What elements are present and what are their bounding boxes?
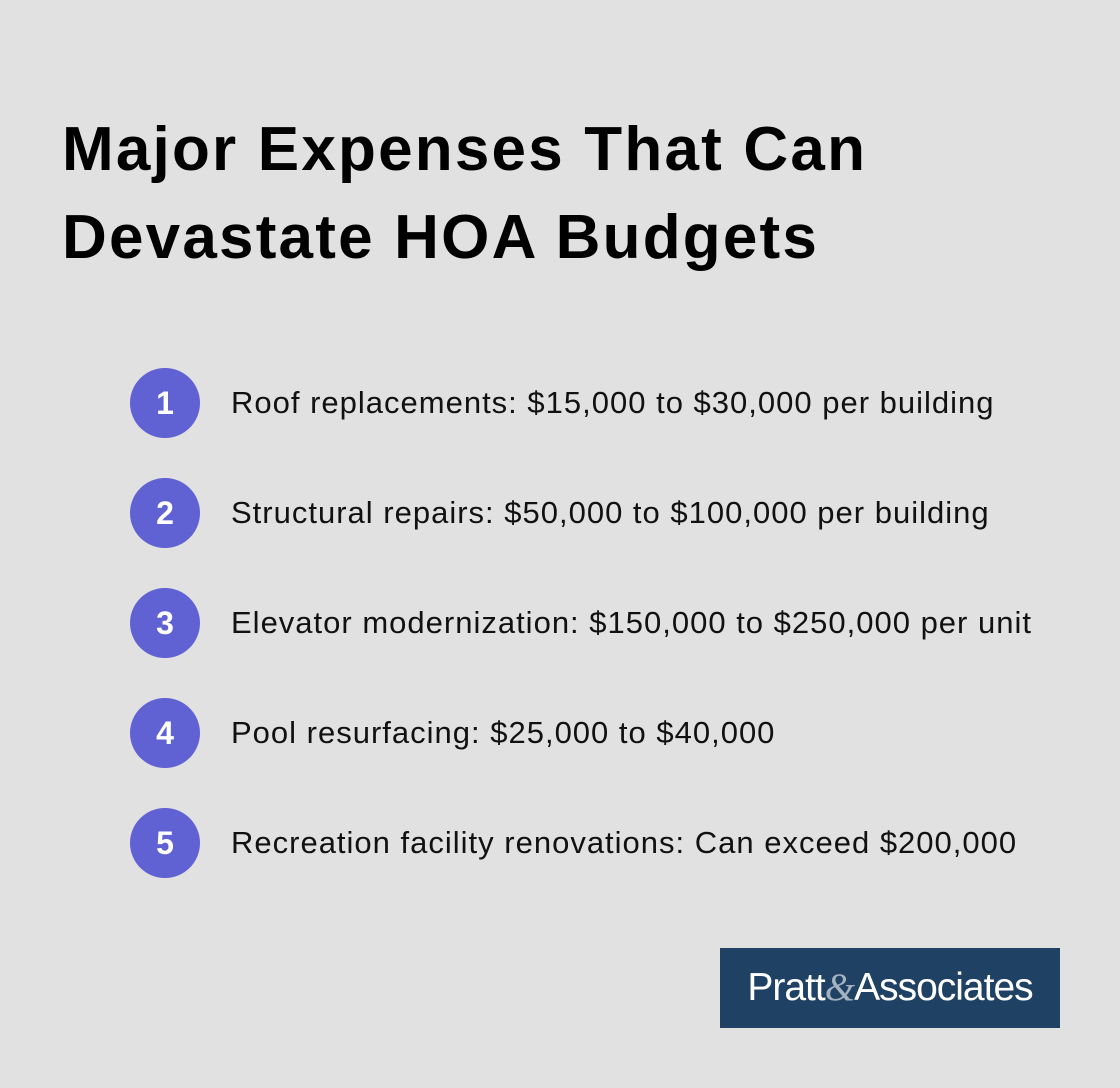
logo	[720, 948, 1060, 1028]
item 4: 4	[156, 715, 174, 751]
item 2: 2	[156, 495, 174, 531]
item 2: Structural repairs: $50,000 to $100,000 per building	[231, 495, 990, 530]
item 5	[130, 808, 1017, 878]
title: Devastate HOA Budgets	[62, 203, 819, 272]
item 3: 3	[156, 605, 174, 641]
logo: Pratt&Associates	[747, 966, 1033, 1009]
item 1: Roof replacements: $15,000 to $30,000 per building	[231, 385, 994, 420]
item 5: 5	[156, 825, 174, 861]
item 1: 1	[156, 385, 174, 421]
item 4	[130, 698, 775, 768]
title: Major Expenses That Can	[62, 115, 867, 184]
title	[62, 115, 867, 272]
item 5: Recreation facility renovations: Can exceed $200,000	[231, 825, 1017, 860]
item 4: Pool resurfacing: $25,000 to $40,000	[231, 715, 775, 750]
item 3	[130, 588, 1032, 658]
item 3: Elevator modernization: $150,000 to $250,000 per unit	[231, 605, 1032, 640]
item 2	[130, 478, 990, 548]
item 1	[130, 368, 994, 438]
